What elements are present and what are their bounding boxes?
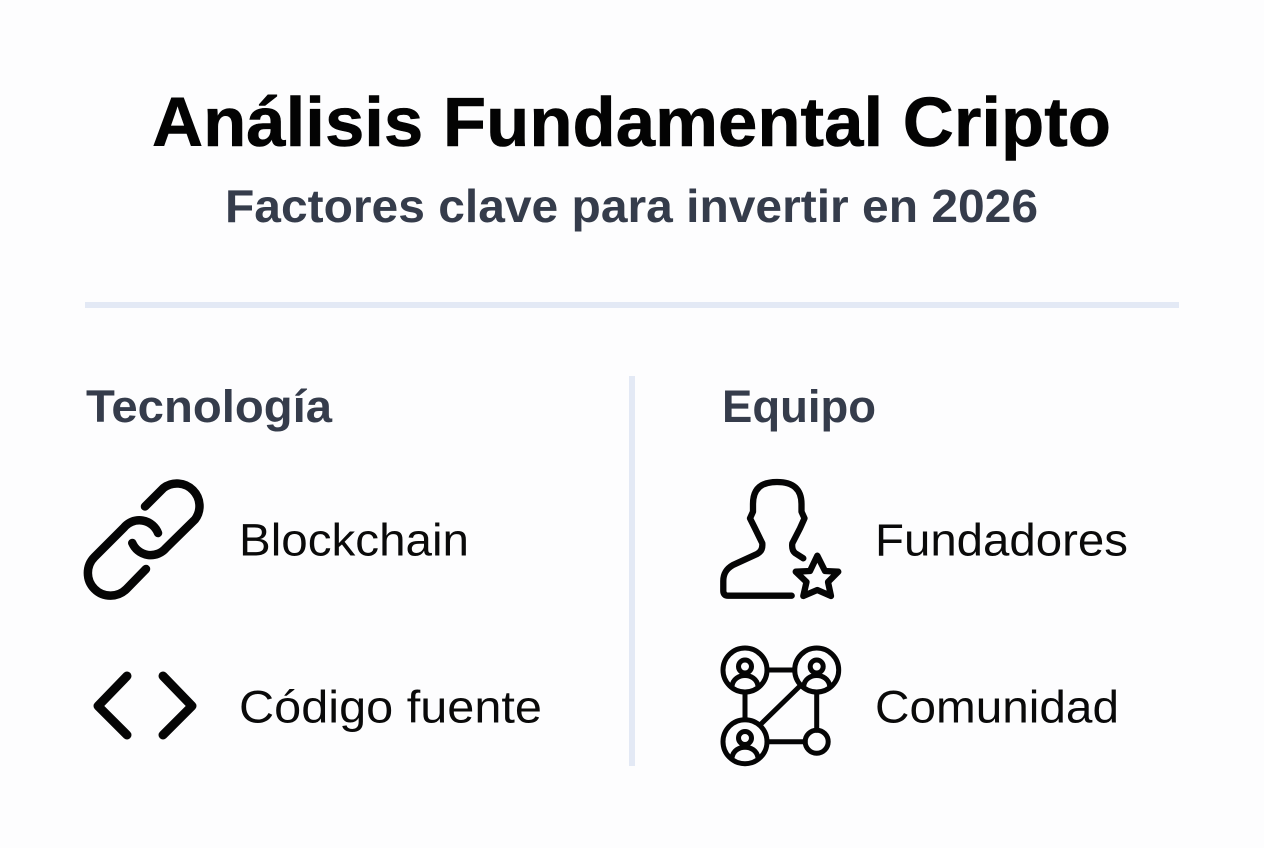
icon: chain link — [88, 483, 200, 596]
heading: Equipo: Equipo — [722, 381, 876, 432]
panel: tecnología — [86, 381, 542, 735]
title: Análisis Fundamental Cripto — [152, 83, 1111, 161]
label: Comunidad: Comunidad — [875, 682, 1119, 732]
icon: founder with star — [723, 482, 838, 596]
label: Fundadores: Fundadores — [875, 514, 1128, 566]
icon: community network — [723, 648, 839, 764]
panel: equipo — [722, 381, 1128, 764]
label: Blockchain: Blockchain — [239, 514, 469, 566]
subtitle: Factores clave para invertir en 2026 — [225, 180, 1038, 232]
label: Código fuente: Código fuente — [239, 682, 542, 732]
heading: Tecnología: Tecnología — [86, 381, 333, 432]
icon: code brackets — [98, 676, 192, 735]
